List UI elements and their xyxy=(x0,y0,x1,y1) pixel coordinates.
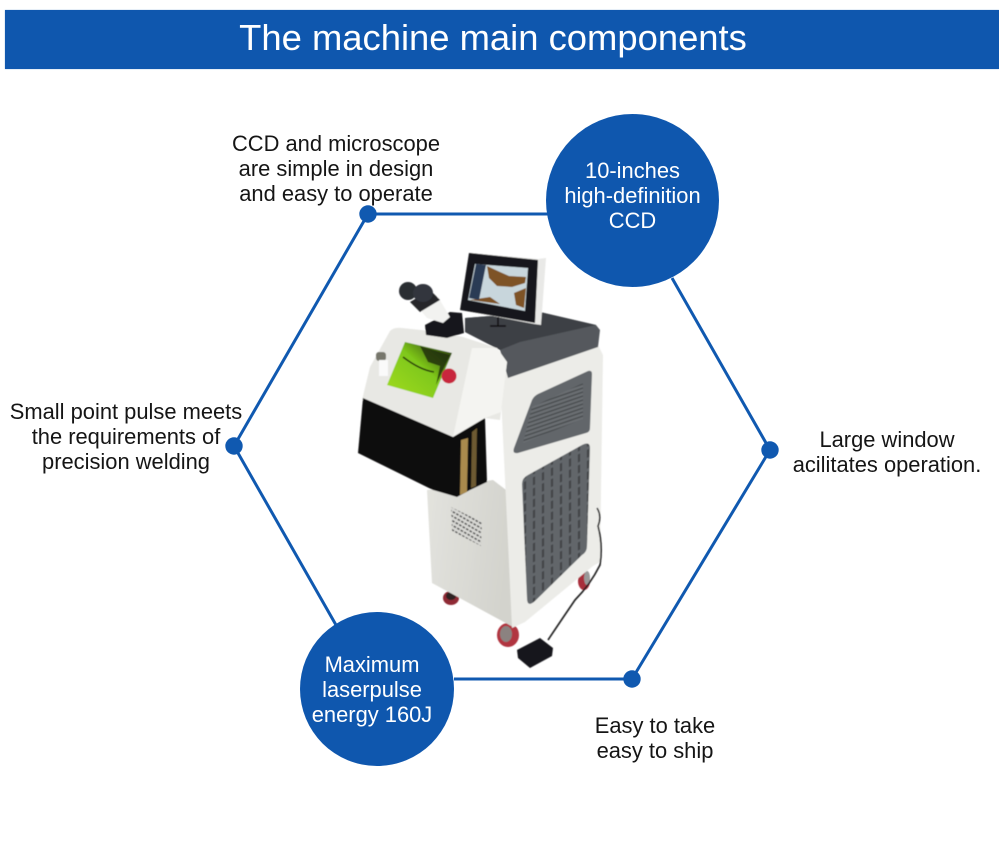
label: easy to take: easy to ship xyxy=(597,738,713,763)
label: large window: Large window xyxy=(819,427,955,452)
top deck xyxy=(465,312,600,378)
label: maximum laser pulse energy xyxy=(312,652,432,727)
large perforated panel xyxy=(522,444,590,604)
node: top left xyxy=(359,205,377,223)
node: right xyxy=(761,441,779,459)
node: bottom right xyxy=(623,670,641,688)
hexagon outline xyxy=(234,214,770,679)
label: large window xyxy=(793,427,981,477)
label: small point pulse: precision welding xyxy=(42,449,210,474)
label: easy to take xyxy=(595,713,715,763)
label: 10-inches high-definition CCD: high-definition xyxy=(564,183,701,208)
label: small point pulse: Small point pulse meets xyxy=(10,399,242,424)
emergency stop button xyxy=(442,368,456,384)
label: maximum laser pulse energy: Maximum xyxy=(325,652,419,677)
label: maximum laser pulse energy: energy 160J xyxy=(312,702,432,727)
label: 10-inches high-definition CCD xyxy=(564,158,701,233)
label: CCD and microscope xyxy=(232,131,440,206)
label: large window: acilitates operation. xyxy=(793,452,981,477)
label: CCD and microscope: and easy to operate xyxy=(239,181,433,206)
side knob xyxy=(376,352,388,376)
label: small point pulse: the requirements of xyxy=(32,424,220,449)
lower cabinet xyxy=(427,480,513,627)
label: maximum laser pulse energy: laserpulse xyxy=(322,677,422,702)
side vent xyxy=(451,507,482,546)
title banner: The machine main components xyxy=(239,17,747,58)
label: 10-inches high-definition CCD: 10-inches xyxy=(585,158,680,183)
black curtain xyxy=(358,398,487,497)
title banner xyxy=(5,10,999,69)
laser welding machine illustration xyxy=(358,253,603,668)
label: small point pulse xyxy=(10,399,242,474)
right side body xyxy=(500,345,603,628)
label: CCD and microscope: CCD and microscope xyxy=(232,131,440,156)
microscope xyxy=(399,282,464,338)
label: CCD and microscope: are simple in design xyxy=(239,156,433,181)
green safety window xyxy=(387,342,452,398)
node: left xyxy=(225,437,243,455)
foot pedal xyxy=(517,638,553,668)
small grey vent panel xyxy=(514,371,592,453)
circle: 10-inches CCD xyxy=(546,114,719,287)
label: easy to take: Easy to take xyxy=(595,713,715,738)
foot pedal cable xyxy=(548,508,601,640)
circle: maximum laser pulse xyxy=(300,612,454,766)
touch screen monitor xyxy=(460,253,546,326)
label: 10-inches high-definition CCD: CCD xyxy=(609,208,656,233)
head housing xyxy=(362,328,507,437)
casters xyxy=(443,571,590,647)
